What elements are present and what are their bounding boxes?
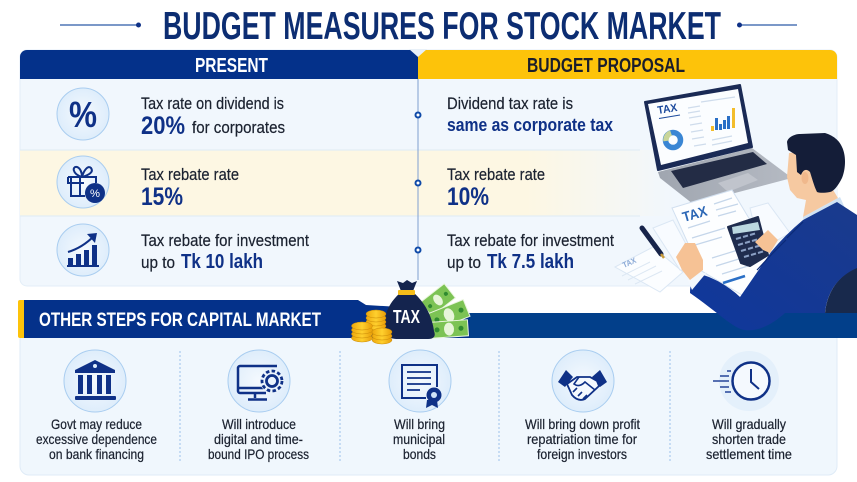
step 1: bank financing: on bank financing bbox=[49, 446, 144, 462]
icon: percent bbox=[57, 88, 109, 140]
step 5: settlement clock: shorten trade bbox=[712, 431, 786, 447]
icon: gold coins bbox=[352, 310, 392, 344]
step 2: digital IPO: digital and time- bbox=[214, 431, 303, 447]
text: present rebate rate: Tax rebate rate bbox=[141, 165, 239, 184]
step 2: digital IPO: Will introduce bbox=[222, 416, 296, 432]
step 4: foreign investors handshake: foreign investors bbox=[537, 446, 627, 462]
icon: gift with percent bbox=[57, 156, 109, 208]
hand on calculator bbox=[755, 230, 778, 253]
icon: gift with percent: % bbox=[90, 188, 100, 200]
jacket bbox=[690, 202, 857, 330]
panel: other steps bbox=[20, 330, 837, 475]
row highlight: tax rebate rate bbox=[20, 150, 837, 216]
icon: banknotes bbox=[421, 284, 470, 338]
header: present: PRESENT bbox=[195, 55, 268, 77]
step 4: foreign investors handshake: repatriation time for bbox=[527, 431, 637, 447]
illustration: tax papers and pen: TAX bbox=[621, 256, 638, 270]
text: present rebate rate: 15% bbox=[141, 183, 183, 211]
text: present rebate rate bbox=[141, 165, 239, 211]
step 3: municipal bonds bbox=[389, 350, 451, 462]
panel: comparison table bbox=[20, 49, 837, 286]
step 1: bank financing: Govt may reduce bbox=[51, 416, 142, 432]
text: present investment rebate: up to bbox=[141, 253, 175, 272]
step 5: settlement clock: settlement time bbox=[706, 446, 792, 462]
step 3: municipal bonds: Will bring bbox=[394, 416, 445, 432]
centre connector bbox=[409, 49, 427, 280]
hair bbox=[787, 133, 845, 193]
text: proposal rebate rate: Tax rebate rate bbox=[447, 165, 545, 184]
illustration: laptop: TAX bbox=[657, 102, 679, 117]
text: proposal investment rebate bbox=[447, 231, 614, 273]
text: present dividend bbox=[141, 94, 285, 140]
icon: percent: % bbox=[69, 94, 97, 135]
header: present bbox=[20, 50, 418, 79]
step 4: foreign investors handshake: Will bring down profit bbox=[525, 416, 640, 432]
hand on paper bbox=[676, 243, 703, 280]
text: proposal rebate rate: 10% bbox=[447, 183, 489, 211]
step 5: settlement clock: Will gradually bbox=[712, 416, 786, 432]
step 5: settlement clock bbox=[706, 351, 792, 462]
header: budget proposal bbox=[418, 50, 837, 79]
text: present dividend: for corporates bbox=[192, 118, 285, 137]
section banner: other steps for capital market: OTHER STEPS FOR CAPITAL MARKET bbox=[39, 310, 321, 331]
illustration: calculator bbox=[728, 217, 768, 266]
text: proposal rebate rate bbox=[447, 165, 545, 211]
chair bbox=[825, 267, 857, 313]
text: proposal investment rebate: Tk 7.5 lakh bbox=[487, 251, 574, 273]
text: present dividend: 20% bbox=[141, 112, 185, 140]
text: present investment rebate bbox=[141, 231, 309, 273]
text: proposal dividend bbox=[447, 94, 613, 135]
step 2: digital IPO: bound IPO process bbox=[208, 446, 309, 462]
illustration: tax papers and pen bbox=[615, 190, 790, 295]
text: proposal dividend: Dividend tax rate is bbox=[447, 94, 573, 113]
ear bbox=[802, 172, 808, 184]
text: proposal dividend: same as corporate tax bbox=[447, 115, 613, 135]
icon: tax money bag bbox=[385, 280, 435, 339]
step 1: bank financing: excessive dependence bbox=[36, 431, 157, 447]
text: present investment rebate: Tax rebate for investment bbox=[141, 231, 309, 250]
shirt cuff bbox=[688, 272, 707, 290]
dotted separators bbox=[180, 351, 670, 462]
text: present investment rebate: Tk 10 lakh bbox=[181, 251, 263, 273]
neck and face bbox=[787, 150, 838, 217]
icon: tax money bag: TAX bbox=[393, 307, 420, 327]
step 4: foreign investors handshake bbox=[525, 350, 640, 462]
shirt collar bbox=[803, 197, 845, 226]
step 1: bank financing bbox=[36, 350, 157, 462]
text: present dividend: Tax rate on dividend is bbox=[141, 94, 284, 113]
step 2: digital IPO bbox=[208, 350, 309, 462]
section banner: other steps for capital market bbox=[18, 300, 857, 338]
icon: rising bar chart bbox=[57, 224, 109, 276]
step 3: municipal bonds: bonds bbox=[403, 446, 436, 462]
header: budget proposal: BUDGET PROPOSAL bbox=[527, 55, 685, 77]
text: proposal investment rebate: up to bbox=[447, 253, 481, 272]
illustration: tax papers and pen: TAX bbox=[680, 202, 709, 225]
illustration: laptop bbox=[645, 85, 788, 204]
step 3: municipal bonds: municipal bbox=[393, 431, 445, 447]
text: proposal investment rebate: Tax rebate for investment bbox=[447, 231, 614, 250]
illustration: businessman bbox=[676, 133, 857, 330]
